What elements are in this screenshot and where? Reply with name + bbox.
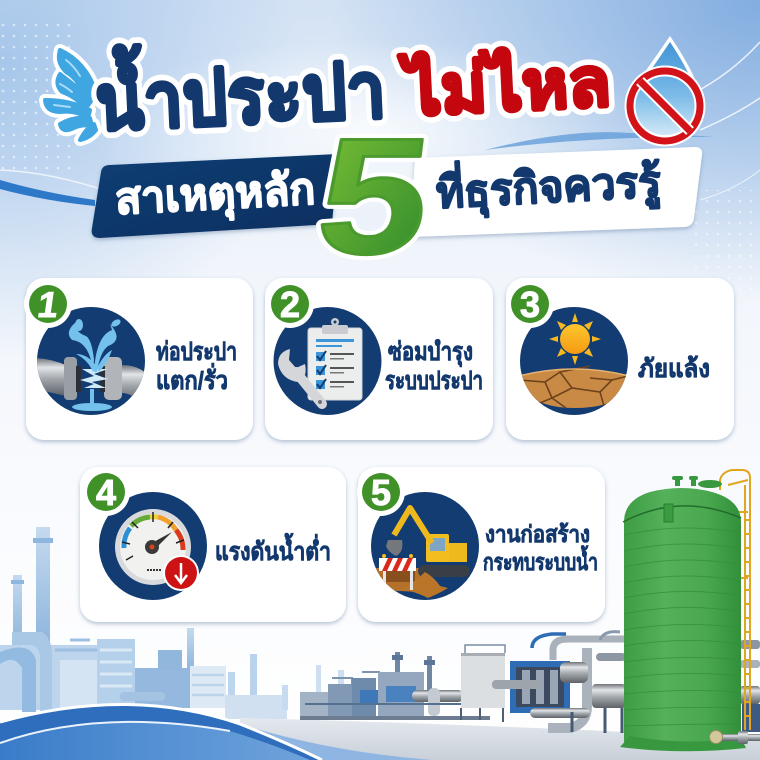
icon: excavator and roadworks <box>370 492 479 600</box>
label: งานก่อสร้าง กระทบระบบน้ำ <box>483 521 598 575</box>
title line one: น้ำประปา: น้ำประปา <box>93 33 387 147</box>
tank nozzles <box>672 476 722 488</box>
tank body <box>624 488 741 747</box>
ground <box>240 718 760 760</box>
label: แรงดันน้ำต่ำ: แรงดันน้ำต่ำ <box>215 532 331 566</box>
tank base <box>620 736 746 751</box>
label: ซ่อมบำรุง ระบบประปา: ซ่อมบำรุง <box>388 338 473 368</box>
factory background left (faded) <box>0 527 344 719</box>
icon: burst pipe <box>32 307 150 415</box>
badge 5 <box>357 468 405 516</box>
badge 3 <box>506 280 554 328</box>
badge 3: 3 <box>520 284 540 325</box>
badge 1 <box>24 280 72 328</box>
banner text: สาเหตุหลัก: สาเหตุหลัก <box>114 165 316 227</box>
badge 1: 1 <box>35 284 61 325</box>
large number 5: 5 <box>309 104 440 289</box>
banner: navy left <box>92 154 338 238</box>
bottom wave <box>0 704 432 760</box>
title line one: ไม่ไหล: ไม่ไหล <box>398 42 612 130</box>
panel: card 1 <box>24 278 253 440</box>
label: งานก่อสร้าง กระทบระบบน้ำ: กระทบระบบน้ำ <box>483 545 598 575</box>
storage tank <box>620 470 760 751</box>
card background <box>265 278 493 440</box>
badge 2: 2 <box>280 284 300 325</box>
label: งานก่อสร้าง กระทบระบบน้ำ: งานก่อสร้าง <box>485 521 590 547</box>
card background <box>80 467 346 622</box>
label: ท่อประปา แตก/รั่ว: ท่อประปา <box>156 338 237 366</box>
tank outlet pipe <box>710 730 760 744</box>
large number 5: 5 <box>309 104 440 289</box>
panel: card 4 <box>80 467 346 622</box>
card background <box>506 278 734 440</box>
badge 5: 5 <box>371 472 391 513</box>
banner text: ที่ธุรกิจควรรู้: ที่ธุรกิจควรรู้ <box>435 150 663 221</box>
label: ท่อประปา แตก/รั่ว <box>156 338 237 395</box>
panel: card 5 <box>357 467 605 622</box>
badge 4 <box>82 468 130 516</box>
title <box>45 33 703 147</box>
label: ภัยแล้ง: ภัยแล้ง <box>638 355 710 383</box>
tank ladder <box>720 470 750 730</box>
splash icon <box>45 50 96 140</box>
panel: card 3 <box>506 278 734 440</box>
factory foreground right <box>300 632 760 733</box>
subtitle banner <box>92 104 702 289</box>
icon: pressure gauge <box>99 492 207 600</box>
icon: sun and cracked earth <box>515 307 633 415</box>
title line one: ไม่ไหล: ไม่ไหล <box>398 42 612 130</box>
label: ท่อประปา แตก/รั่ว: แตก/รั่ว <box>156 363 228 395</box>
label: ซ่อมบำรุง ระบบประปา <box>385 338 483 395</box>
label: ซ่อมบำรุง ระบบประปา: ระบบประปา <box>385 367 483 395</box>
title line one: น้ำประปา: น้ำประปา <box>93 33 387 147</box>
card background <box>358 467 605 622</box>
panel: card 2 <box>265 278 493 440</box>
badge 2 <box>266 280 314 328</box>
card background <box>26 278 253 440</box>
badge 4: 4 <box>96 472 116 513</box>
icon: prohibited water drop <box>627 36 703 144</box>
banner: white right <box>410 147 702 237</box>
icon: clipboard and wrench <box>274 307 382 415</box>
